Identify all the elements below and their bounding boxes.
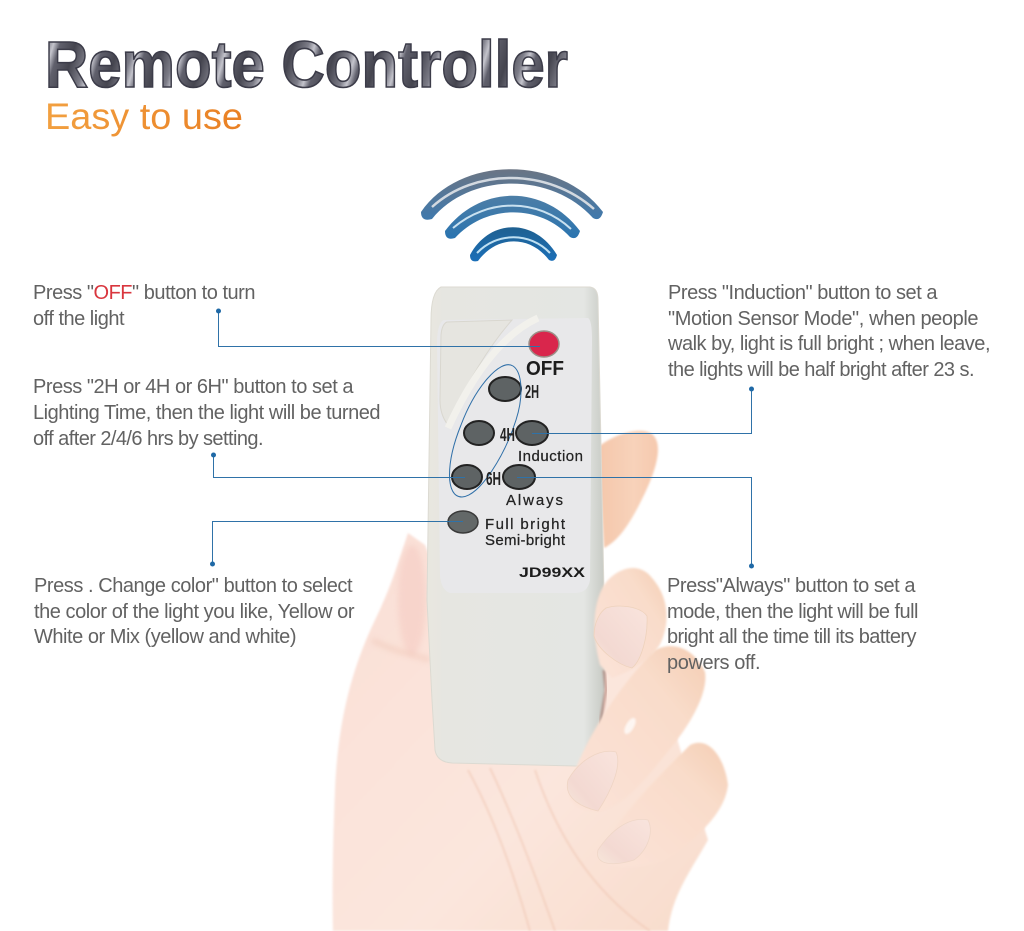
text: induction instruction: the lights will be half bright after 23 s. [668, 359, 974, 381]
little finger [599, 743, 728, 867]
off button [529, 331, 559, 357]
text: always instruction: mode, then the light will be full [667, 601, 918, 623]
text: time instruction: Press "2H or 4H or 6H" button to set a [33, 376, 354, 398]
connector lines [212, 311, 752, 566]
text: color instruction [34, 575, 355, 648]
color button [448, 511, 478, 533]
text: color instruction: the color of the light you like, Yellow or [34, 601, 355, 623]
always connector [517, 478, 752, 566]
off connector [218, 311, 540, 346]
icon: wireless signal arcs [421, 169, 603, 261]
shadow between remote and fingers [600, 670, 606, 725]
middle fingernail [594, 606, 647, 668]
text: time instruction: Lighting Time, then the light will be turned [33, 402, 380, 424]
text: color instruction: White or Mix (yellow and white) [34, 626, 296, 648]
thumb crease [372, 640, 430, 660]
connector dots [210, 308, 754, 568]
semi-bright label: Semi-bright [485, 532, 566, 549]
ring fingernail [567, 751, 618, 811]
curved ridge [448, 318, 538, 428]
text: off instruction: Press "OFF" button to turn [33, 282, 255, 304]
title: Remote Controller [45, 27, 568, 101]
color connector [212, 522, 463, 564]
remote face panel [437, 318, 592, 593]
induction connector [532, 389, 752, 434]
remote control [427, 287, 605, 766]
time button oval [450, 365, 521, 497]
full bright label: Full bright [485, 516, 566, 533]
time connector [214, 455, 465, 478]
2H button [489, 377, 521, 401]
text: always instruction: bright all the time till its battery [667, 626, 916, 648]
text: time instruction: off after 2/4/6 hrs by setting. [33, 428, 263, 450]
off label: OFF [526, 358, 564, 380]
2H label: 2H [525, 382, 539, 402]
thumb pink tone [398, 545, 426, 655]
always button [503, 465, 535, 489]
palm creases [468, 768, 650, 931]
text: color instruction: Press . Change color" button to select [34, 575, 353, 597]
6H label: 6H [486, 469, 501, 489]
text: induction instruction: "Motion Sensor Mode", when people [668, 308, 978, 330]
text: always instruction: powers off. [667, 652, 760, 674]
4H label: 4H [500, 425, 515, 445]
ring finger highlight [622, 716, 638, 736]
induction label: Induction [518, 448, 583, 465]
hand illustration [333, 431, 708, 931]
text: induction instruction: Press "Induction" button to set a [668, 282, 938, 304]
text: always instruction [667, 575, 918, 674]
index finger behind the remote [598, 431, 658, 548]
text: time instruction [33, 376, 380, 450]
subtitle: Easy to use [45, 96, 243, 137]
text: induction instruction [667, 282, 990, 381]
palm and thumb [333, 533, 708, 931]
ring finger [569, 646, 705, 812]
remote body [427, 287, 605, 766]
always label: Always [506, 492, 563, 509]
model label: JD99XX [519, 564, 586, 580]
text: always instruction: Press"Always" button to set a [667, 575, 916, 597]
text: off instruction [33, 282, 255, 330]
induction button [516, 421, 548, 445]
curved recess [440, 320, 512, 425]
little fingernail [598, 819, 650, 864]
text: induction instruction: walk by, light is full bright ; when leave, [667, 333, 990, 355]
4H button [464, 421, 494, 445]
fingers in front of remote [567, 568, 728, 867]
text: off instruction: off the light [33, 308, 125, 330]
6H button [452, 465, 482, 489]
middle finger [594, 568, 667, 678]
